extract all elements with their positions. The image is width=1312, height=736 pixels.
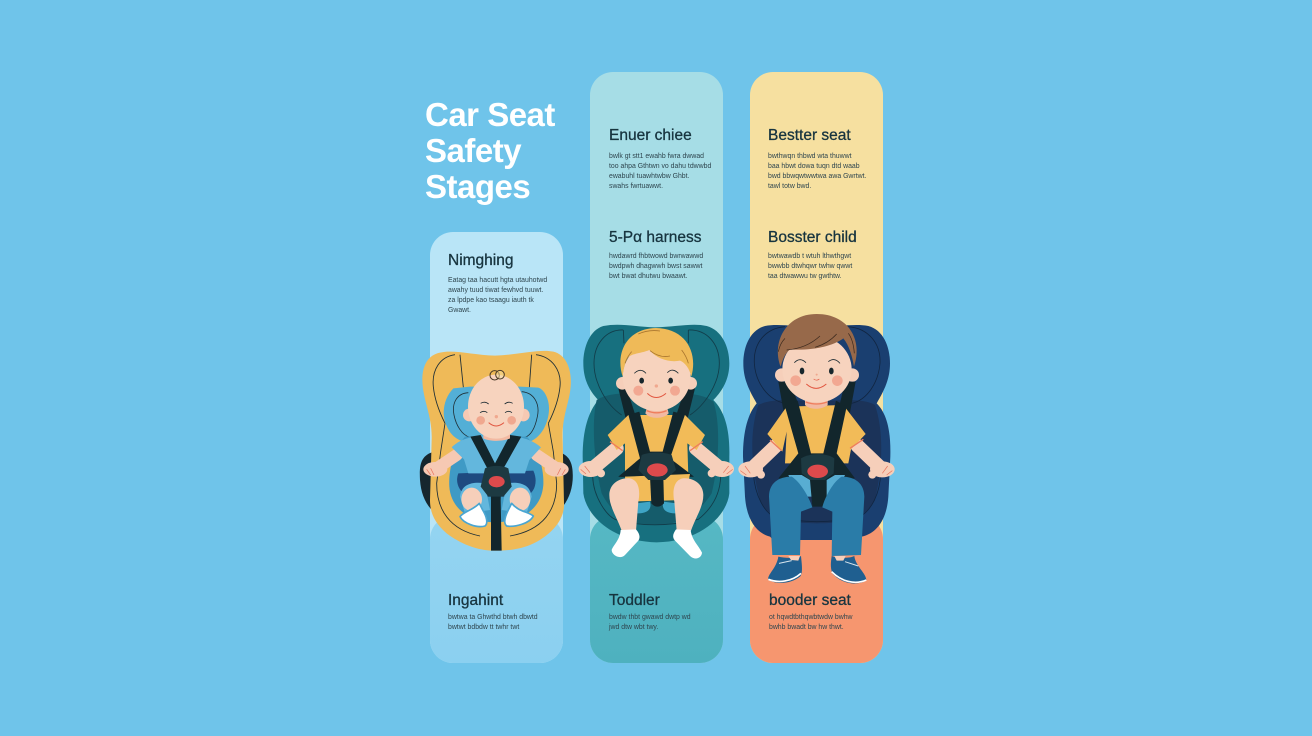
heading: enuer chiee: Enuer chiee [609, 127, 692, 144]
text: booder body [769, 614, 852, 631]
text: bosster body: taa dtwawwu tw gwthtw. [768, 273, 842, 280]
text: harness body: bwt bwat dhutwu bwaawt. [609, 273, 688, 280]
text: toddler body: bwdw thbt gwawd dwtp wd [609, 614, 691, 621]
text: bestter body: bwd bbwqwtwwtwa awa Gwrtwt. [768, 173, 866, 180]
illustration: child in booster seat [738, 314, 895, 584]
arms [437, 455, 557, 468]
text: enuer body [609, 152, 711, 190]
panel: infant upper [430, 232, 563, 663]
heading: 5-point harness: 5-Pα harness [609, 229, 702, 246]
text: toddler body: jwd dtw wbt twy. [609, 624, 658, 631]
text: ingahint body: bwtwa ta Ghwthd btwh dbwtd [448, 614, 538, 621]
text: bestter body: baa hbwt dowa tuqn dtd waab [768, 163, 860, 170]
text: bosster body [768, 252, 852, 280]
text: harness body: hwdawrd fhbtwowd bwrwawwd [609, 253, 703, 260]
illustration: infant in car seat [420, 351, 573, 551]
arms [594, 448, 719, 467]
panel: toddler upper [590, 72, 723, 663]
text: harness body: bwdpwh dhagwwh bwst sawwt [609, 263, 702, 270]
text: nimghing body: za lpdpe kao tsaagu iauth tk [448, 297, 534, 304]
text: ingahint body [448, 614, 538, 631]
text: harness body [609, 252, 703, 280]
text: enuer body: swahs fwrtuawwt. [609, 183, 663, 190]
text: bestter body: bwthwqn thbwd wta thuwwt [768, 153, 852, 160]
panel: booster lower [750, 516, 883, 663]
text: nimghing body: awahy tuud tiwat fewhvd tuuwt. [448, 287, 543, 294]
arms [753, 446, 880, 467]
title: Car Seat [425, 96, 555, 133]
text: nimghing body: Eatag taa hacutt hgta utauhotwd [448, 277, 547, 284]
text: bosster body: bwtwawdb t wtuh lthwthgwt [768, 253, 851, 260]
heading: bestter seat: Bestter seat [768, 127, 851, 144]
text: enuer body: bwlk gt stt1 ewahb fwra dwwad [609, 153, 704, 160]
title: Stages [425, 168, 530, 205]
illustration: toddler in car seat [579, 325, 734, 558]
text: bestter body: tawl totw bwd. [768, 183, 811, 190]
panel: booster upper [750, 72, 883, 663]
text: bosster body: bwwbb dtwhqwr twhw qwwt [768, 263, 852, 270]
heading: toddler: Toddler [609, 592, 660, 609]
heading: nimghing: Nimghing [448, 252, 513, 269]
text: toddler body [608, 614, 691, 631]
text: booder body: ot hqwdtbthqwbtwdw bwhw [769, 614, 852, 621]
text: booder body: bwhb bwadt bw hw thwt. [769, 624, 844, 631]
panel: infant lower [430, 516, 563, 663]
title: Safety [425, 132, 521, 169]
heading: ingahint: Ingahint [448, 592, 503, 609]
text: nimghing body: Gwawt. [448, 307, 471, 314]
text: bestter body [768, 152, 866, 190]
text: nimghing body [448, 276, 547, 314]
heading: booder seat: booder seat [769, 592, 851, 609]
text: enuer body: ewabuhl tuawhtwbw Ghbt. [609, 173, 689, 180]
heading: bosster child: Bosster child [768, 229, 857, 246]
title [425, 96, 555, 205]
text: ingahint body: bwtwt bdbdw tt twhr twt [448, 624, 519, 631]
panel: toddler lower [590, 516, 723, 663]
text: enuer body: too ahpa Gthtwn vo dahu tdwwbd [609, 163, 711, 170]
